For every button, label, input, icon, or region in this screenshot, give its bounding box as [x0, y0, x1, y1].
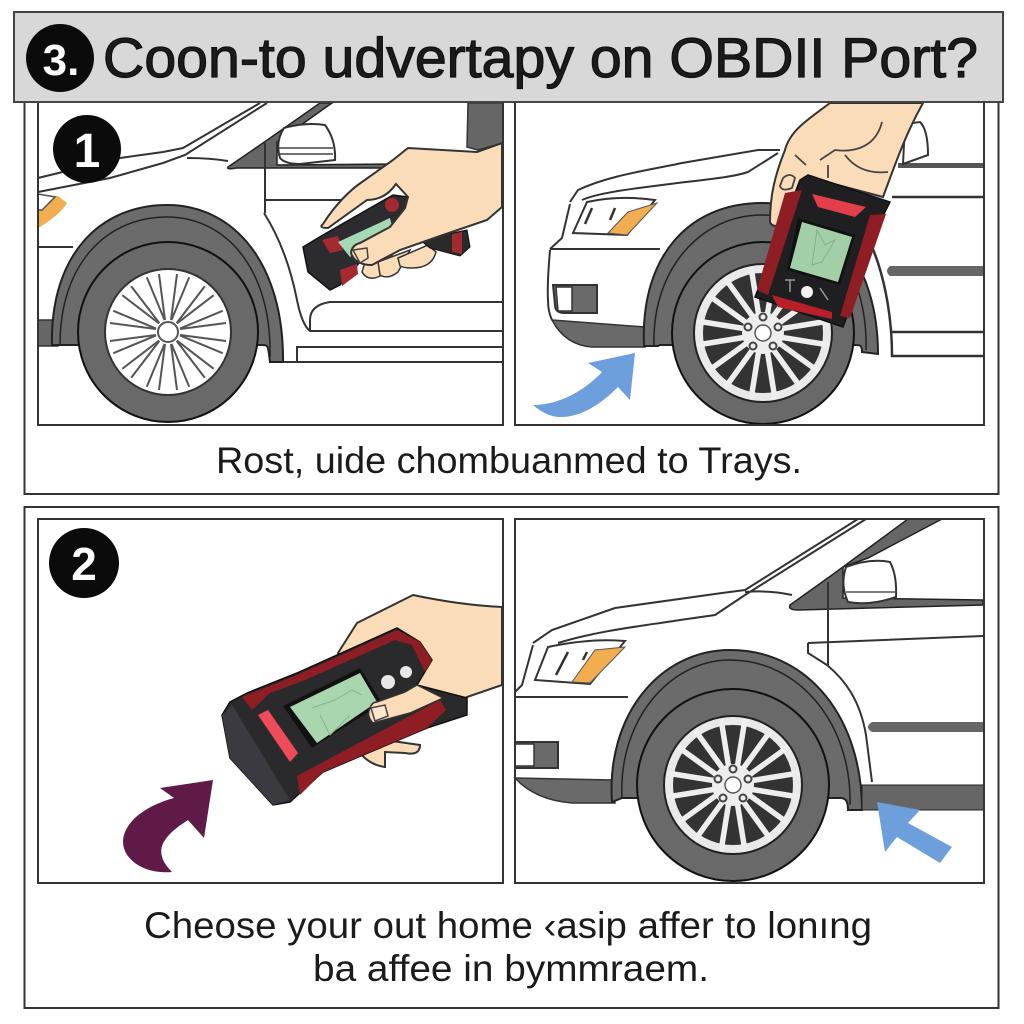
title bar — [14, 12, 1003, 102]
arrow: maroon curved — [123, 780, 213, 872]
icon: scanner held in hand — [303, 143, 502, 290]
badge: number 1: 1 — [74, 125, 100, 178]
heading: Coon-to udvertapy on OBDII Port? — [103, 26, 978, 89]
illustration: scanner in hand — [38, 519, 503, 883]
badge: number 2: 2 — [71, 538, 97, 590]
caption: step 1: Rost, uide chombuanmed to Trays. — [216, 440, 802, 481]
illustration: car side with arrow pointing to sill — [515, 519, 984, 883]
caption: step 2 — [144, 905, 872, 989]
caption: step 2: Cheose your out home ‹asip affer to lonıng — [144, 905, 872, 946]
panel: step 1 — [24, 96, 998, 494]
arrow: blue — [877, 802, 952, 863]
badge: number 3: 3. — [43, 36, 79, 85]
caption: step 2: ba affee in bymmraem. — [313, 948, 709, 989]
arrow: blue — [533, 353, 635, 417]
badge: number 3 — [26, 24, 94, 92]
icon: scanner — [222, 628, 467, 805]
badge: number 1 — [53, 115, 121, 183]
panel: step 2 — [24, 507, 998, 1008]
icon: scanner with hand — [755, 103, 923, 327]
illustration: car side with hand and scanner — [38, 96, 503, 425]
badge: number 2 — [49, 528, 119, 598]
illustration: car front with scanner over wheel — [515, 96, 984, 425]
